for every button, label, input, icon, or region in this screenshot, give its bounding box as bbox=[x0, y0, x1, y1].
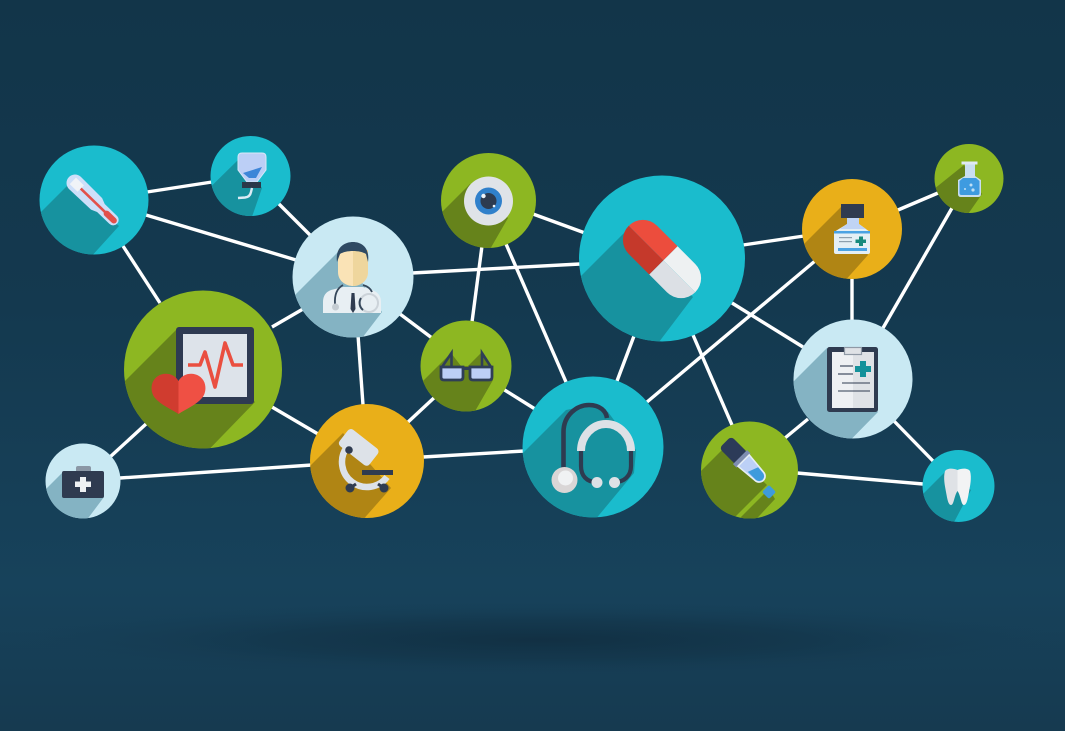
node: stethoscope bbox=[522, 376, 664, 518]
node: IV drip bag bbox=[210, 136, 290, 216]
medical network illustration bbox=[0, 136, 1065, 646]
floor shadow bbox=[15, 602, 1065, 678]
node: medicine bottle bbox=[802, 179, 902, 279]
node: dropper bbox=[701, 422, 798, 518]
network connection lines bbox=[110, 182, 952, 484]
node: eye bbox=[441, 153, 536, 248]
node: heart monitor bbox=[124, 290, 282, 448]
node: first aid kit bbox=[46, 444, 120, 518]
node: clipboard bbox=[794, 320, 912, 438]
node: glasses bbox=[420, 320, 512, 412]
node: flask bbox=[934, 144, 1004, 213]
node: tooth bbox=[922, 450, 994, 522]
node: thermometer bbox=[40, 146, 148, 254]
node: pill capsule bbox=[579, 176, 745, 342]
node: microscope bbox=[310, 404, 424, 518]
node: doctor bbox=[292, 216, 414, 338]
